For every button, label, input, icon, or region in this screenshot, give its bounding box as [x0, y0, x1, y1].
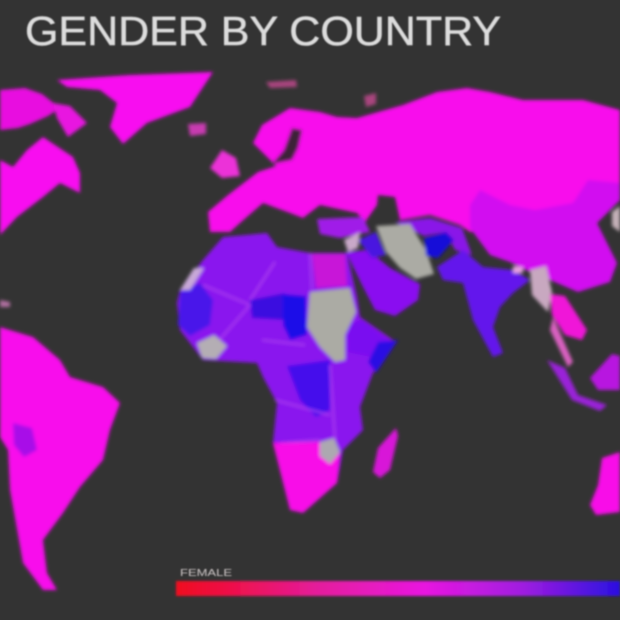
United Kingdom — [210, 150, 240, 178]
Central America speck — [0, 300, 10, 307]
legend label: FEMALE — [180, 568, 232, 579]
Arabian Peninsula — [346, 250, 420, 316]
Turkey — [317, 217, 370, 238]
Indonesia — [547, 360, 607, 411]
Nepal — [513, 266, 523, 273]
Myanmar gray — [530, 266, 552, 312]
Philippines and Borneo — [590, 354, 620, 390]
Afghanistan — [424, 232, 454, 258]
title: GENDER BY COUNTRY — [25, 8, 501, 54]
Madagascar — [373, 428, 398, 478]
Congo — [287, 360, 330, 417]
Zimbabwe gray — [320, 438, 340, 464]
India and Pakistan — [437, 250, 530, 357]
southern Africa — [273, 442, 340, 513]
Japan gray — [612, 206, 620, 232]
Iraq — [358, 232, 386, 258]
Iran gray — [376, 224, 434, 279]
Ethiopia — [347, 320, 390, 357]
Arctic islands — [266, 80, 376, 107]
Greenland — [57, 72, 213, 144]
legend — [176, 568, 620, 596]
Central Asia purple — [395, 218, 472, 255]
North America mainland — [0, 137, 80, 235]
Australia — [590, 452, 620, 515]
Egypt — [312, 254, 347, 288]
Baffin Island — [53, 103, 87, 137]
Niger — [250, 293, 285, 320]
legend gradient bar — [176, 581, 620, 596]
Africa — [177, 233, 393, 513]
Thailand and Vietnam — [550, 294, 587, 340]
African country borders — [203, 253, 335, 443]
West Africa gray — [197, 335, 227, 359]
China — [470, 180, 620, 292]
Malay Peninsula — [550, 317, 573, 367]
West Africa blue — [178, 283, 213, 336]
Bolivia — [13, 423, 37, 457]
Baltic Sea — [272, 128, 302, 164]
Somalia — [368, 340, 398, 373]
South America — [0, 327, 120, 590]
Western Sahara gray — [180, 268, 204, 290]
Chad — [283, 294, 307, 340]
Sudan gray — [307, 288, 356, 362]
Canadian Arctic — [0, 88, 60, 130]
Levant gray — [344, 232, 360, 252]
Eurasia — [208, 88, 620, 232]
Iceland — [188, 123, 206, 136]
